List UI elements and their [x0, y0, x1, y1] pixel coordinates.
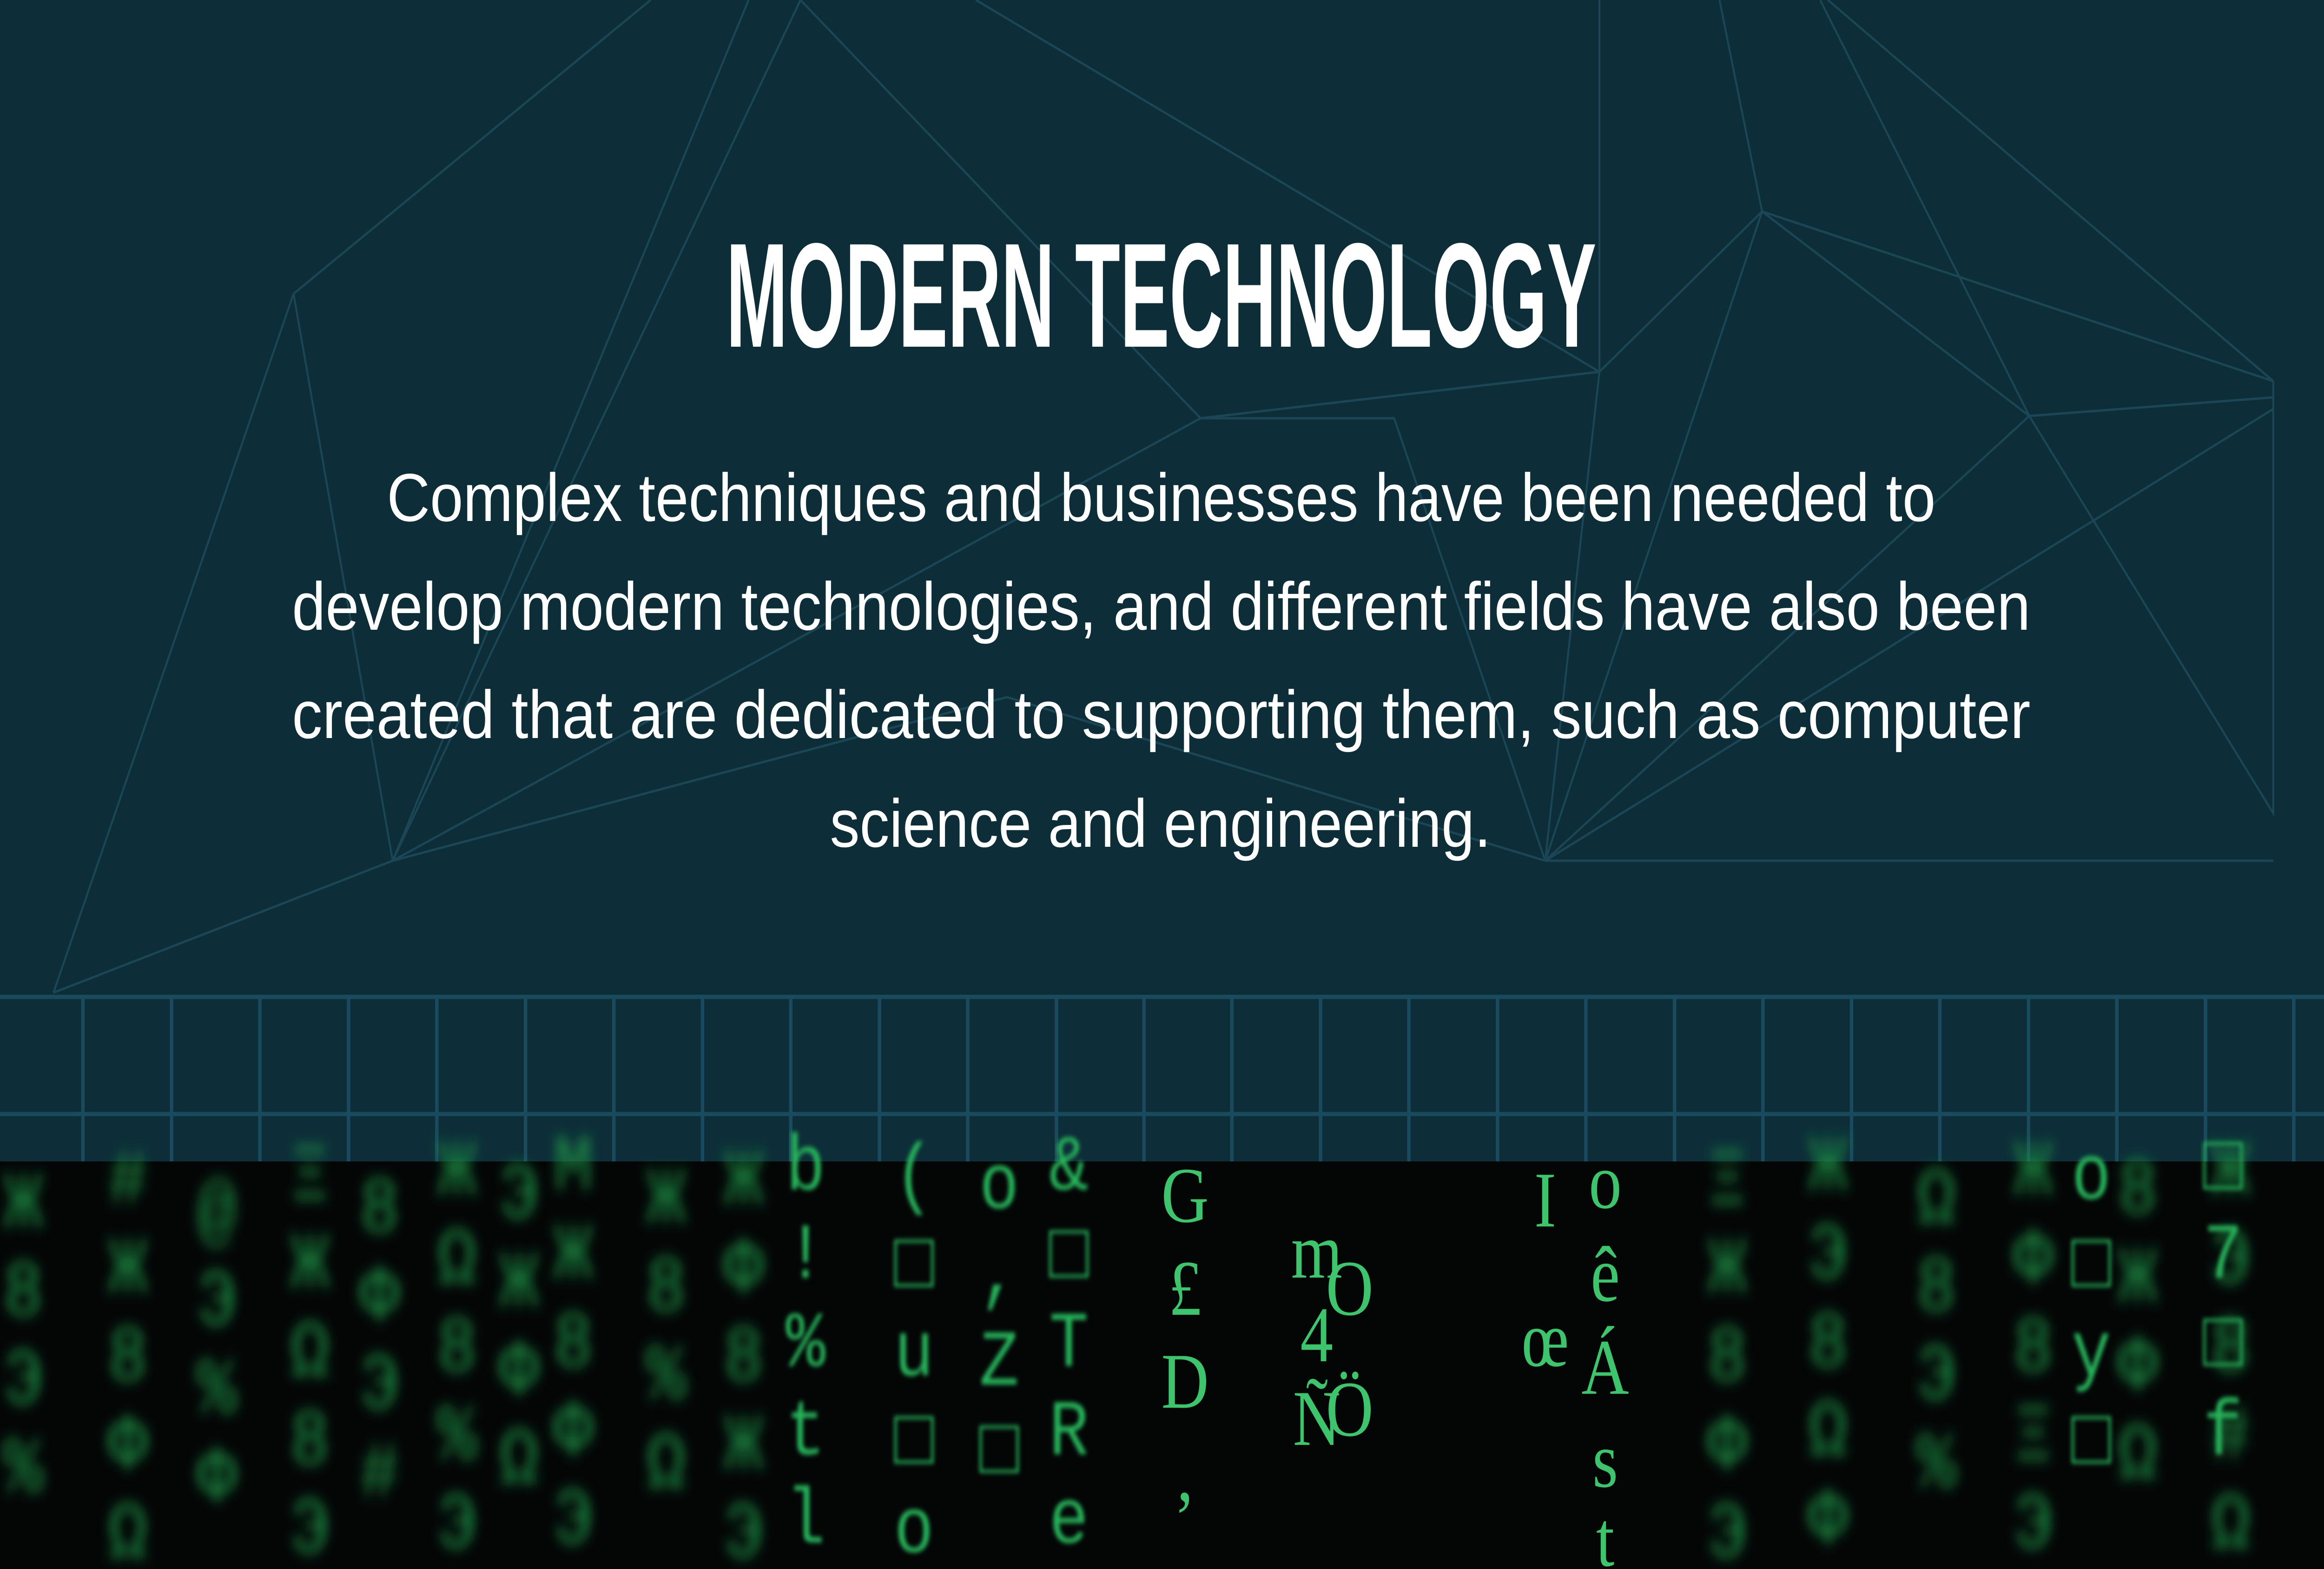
image: matrix code strip: Φ [2014, 1217, 2053, 1306]
image: matrix code strip: b [786, 1124, 825, 1213]
image: matrix code strip: Ξ [1708, 1138, 1747, 1227]
image: matrix code strip: £ [1169, 1245, 1202, 1332]
image: matrix code strip: y [2072, 1310, 2111, 1399]
image: matrix code strip: Э [2014, 1482, 2053, 1569]
image: matrix code strip: ( [894, 1133, 934, 1222]
image: matrix code strip: Ж [3, 1161, 43, 1250]
image: matrix code strip: Ξ [2014, 1393, 2053, 1483]
image: matrix code strip: % [3, 1426, 43, 1515]
image: matrix code strip: ê [1591, 1231, 1620, 1318]
image: matrix code strip: Φ [499, 1328, 539, 1417]
image: matrix code strip: Z [979, 1319, 1019, 1408]
image: matrix code strip: Φ [1808, 1477, 1848, 1566]
image: matrix code strip: & [1049, 1124, 1089, 1213]
image: matrix code strip: 8 [290, 1398, 330, 1487]
image: matrix code strip: O [1326, 1245, 1373, 1332]
image: matrix code strip: Э [499, 1152, 539, 1241]
image: matrix code strip: o [979, 1142, 1019, 1232]
image: matrix code strip: Φ [108, 1403, 148, 1492]
image: matrix code strip: 8 [1808, 1300, 1848, 1390]
image: matrix code strip: Ж [499, 1240, 539, 1329]
image: matrix code strip: f [2203, 1389, 2243, 1478]
image: matrix code strip: 8 [2118, 1147, 2158, 1236]
image: matrix code strip: Ж [724, 1138, 763, 1227]
image: matrix code strip: □ [894, 1221, 934, 1311]
image: matrix code strip: Á [1581, 1324, 1629, 1411]
image: matrix code strip: Φ [360, 1254, 399, 1343]
image: matrix code strip: 8 [724, 1314, 763, 1404]
image: matrix code strip: # [2211, 1393, 2251, 1483]
image: matrix code strip: Ö [1326, 1365, 1373, 1453]
body text: Complex techniques and businesses have been needed to [387, 460, 1935, 536]
image: matrix code strip: Ω [2211, 1482, 2251, 1569]
image: matrix code strip: Φ [724, 1226, 763, 1315]
image: matrix code strip: Ж [2118, 1235, 2158, 1325]
image: matrix code strip: % [647, 1333, 686, 1422]
image: matrix code strip: 8 [2211, 1305, 2251, 1394]
image: matrix code strip: M [554, 1124, 593, 1213]
image: matrix code strip: R [1049, 1389, 1089, 1478]
image: matrix code strip: Ж [554, 1212, 593, 1301]
image: matrix code strip: □ [894, 1398, 934, 1487]
image: matrix code strip: □ [2203, 1124, 2243, 1213]
image: matrix code strip: u [894, 1310, 934, 1399]
image: matrix code strip: Ж [2014, 1128, 2053, 1218]
image: matrix code strip: 8 [1916, 1245, 1956, 1334]
image: matrix code strip: Ω [647, 1421, 686, 1510]
image: matrix code strip: s [1592, 1417, 1618, 1504]
image: matrix code strip: % [437, 1393, 477, 1483]
image: matrix code strip: 8 [108, 1314, 147, 1404]
image: matrix code strip: Э [554, 1477, 593, 1566]
image: matrix code strip: Ñ [1293, 1375, 1340, 1462]
image: matrix code strip: Ж [437, 1128, 477, 1218]
image: matrix code strip: Φ [2118, 1324, 2158, 1413]
image: matrix code strip: Э [197, 1259, 237, 1348]
image: matrix code strip: Ж [724, 1403, 763, 1492]
body text: develop modern technologies, and different fields have also been [292, 569, 2030, 645]
image: matrix code strip: T [1049, 1300, 1089, 1390]
image: matrix code strip: Э [1808, 1212, 1848, 1301]
image: matrix code strip: e [1049, 1477, 1089, 1566]
image: matrix code strip: Ω [1916, 1156, 1956, 1246]
image: matrix code strip: @ [197, 1170, 237, 1259]
image: matrix code strip: Ж [290, 1221, 330, 1311]
image: matrix code strip: l [786, 1477, 825, 1566]
image: matrix code strip: Ω [1808, 1389, 1848, 1478]
image: matrix code strip: Э [3, 1338, 43, 1427]
image: matrix code strip: # [360, 1431, 399, 1520]
image: matrix code strip: o [2072, 1133, 2111, 1222]
image: matrix code strip: □ [2072, 1221, 2111, 1311]
image: matrix code strip: 8 [437, 1305, 477, 1394]
image: matrix code strip: , [1177, 1431, 1193, 1518]
image: matrix code strip: Ж [1708, 1226, 1747, 1315]
image: matrix code strip: Ж [647, 1156, 686, 1246]
image: matrix code strip: Э [1916, 1333, 1956, 1422]
image: matrix code strip: □ [979, 1407, 1019, 1496]
body text: created that are dedicated to supporting them, such as computer [292, 677, 2030, 753]
image: matrix code strip: ! [786, 1212, 825, 1301]
body text: science and engineering. [830, 786, 1491, 862]
image: matrix code strip: 8 [3, 1249, 43, 1338]
image: matrix code strip: t [786, 1389, 825, 1478]
image: matrix code strip: Ξ [290, 1133, 330, 1222]
image: matrix code strip: Э [437, 1482, 477, 1569]
image: matrix code strip: Ж [108, 1226, 148, 1315]
image: matrix code strip: Ω [499, 1417, 539, 1506]
image: matrix code strip: □ [1049, 1212, 1089, 1301]
image: matrix code strip: % [197, 1347, 237, 1436]
image: matrix code strip: % [1916, 1421, 1956, 1510]
image: matrix code strip: œ [1521, 1296, 1569, 1383]
image: matrix code strip: □ [2072, 1398, 2111, 1487]
image: matrix code strip: 4 [1300, 1291, 1333, 1378]
image: matrix code strip: Ж [2211, 1128, 2251, 1218]
title: MODERN TECHNOLOGY [726, 212, 1596, 378]
image: matrix code strip: Φ [1708, 1403, 1747, 1492]
image: matrix code strip [0, 1124, 2324, 1569]
image: matrix code strip: Ω [290, 1310, 330, 1399]
image: matrix code strip: 8 [2014, 1305, 2053, 1394]
image: matrix code strip: D [1161, 1338, 1209, 1425]
image: matrix code strip: Ж [1808, 1124, 1848, 1213]
image: matrix code strip: % [786, 1300, 825, 1390]
image: matrix code strip: 7 [2203, 1212, 2243, 1301]
image: matrix code strip: 8 [1708, 1314, 1747, 1404]
image: matrix code strip: Φ [197, 1435, 237, 1524]
image: matrix code strip: o [1589, 1138, 1622, 1225]
image: matrix code strip: I [1534, 1156, 1556, 1244]
image: matrix code strip: G [1161, 1152, 1209, 1239]
image: matrix code strip: 8 [647, 1245, 686, 1334]
image: matrix code strip: Ω [2118, 1412, 2158, 1501]
image: matrix code strip: m [1291, 1207, 1342, 1295]
image: matrix code strip: Ω [437, 1217, 477, 1306]
image: matrix code strip: Э [2211, 1217, 2251, 1306]
image: matrix code strip: 8 [360, 1166, 399, 1255]
body text [292, 460, 2030, 862]
image: matrix code strip: , [979, 1231, 1019, 1320]
image: matrix code strip: Э [360, 1342, 399, 1431]
image: matrix code strip: Φ [554, 1389, 593, 1478]
image: matrix code strip: # [108, 1138, 147, 1227]
image: matrix code strip: □ [2203, 1300, 2243, 1390]
image: matrix code strip: 8 [554, 1300, 593, 1390]
